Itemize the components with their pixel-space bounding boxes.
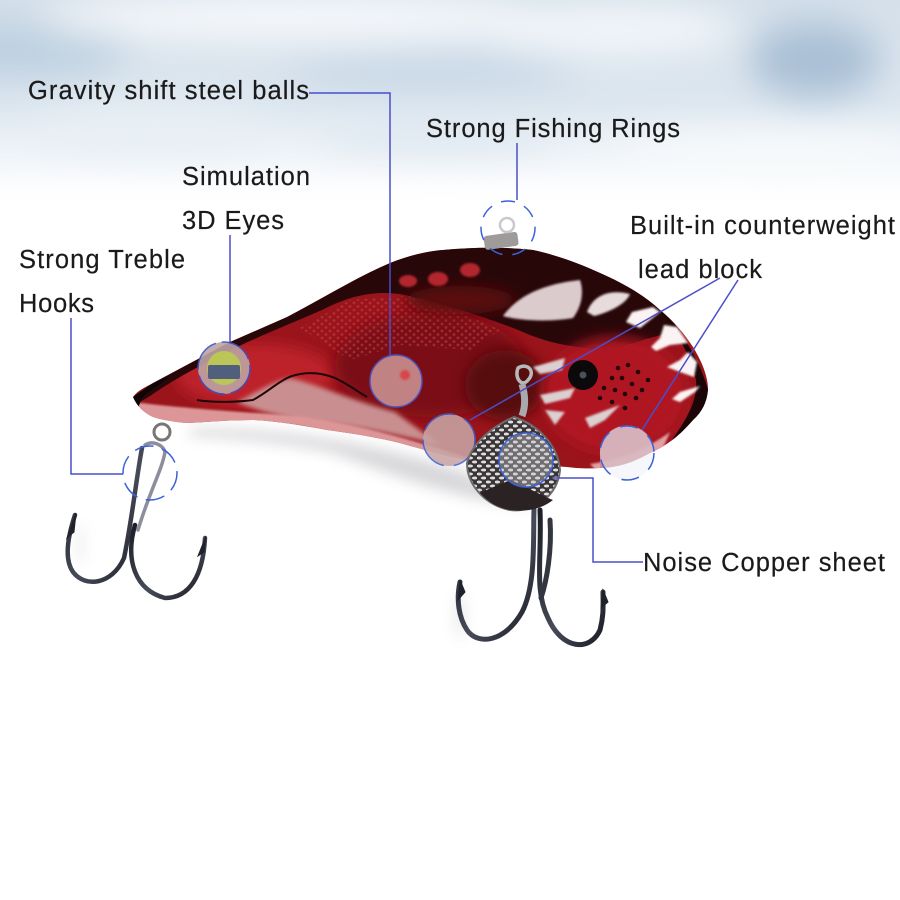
black eye — [568, 360, 598, 390]
line: steel balls — [309, 93, 390, 355]
circle: counterweight belly left — [423, 414, 475, 466]
line: copper sheet — [552, 478, 643, 562]
shadow under lure — [77, 428, 540, 639]
label: noise copper sheet: Noise Copper sheet — [643, 549, 885, 577]
rear treble hook — [67, 424, 206, 598]
label: strong fishing rings: Strong Fishing Rings — [426, 115, 680, 143]
label: strong treble hooks: Hooks — [19, 290, 94, 318]
label: strong treble hooks — [19, 246, 185, 318]
back segments — [399, 263, 480, 287]
label: built-in counterweight lead block — [630, 212, 895, 284]
belly rim at head — [589, 432, 671, 468]
label: built-in counterweight lead block: Built-in counterweight — [630, 212, 895, 240]
front treble hook — [458, 510, 608, 645]
line: counterweight upper — [470, 278, 720, 420]
body line — [197, 373, 367, 402]
dark rim on head — [660, 310, 708, 446]
circle: counterweight belly right — [600, 425, 654, 480]
circle: steel ball — [370, 355, 422, 407]
left flank bright red — [175, 343, 335, 407]
dark red shoulder — [405, 286, 515, 314]
background: snowy mountain sky — [0, 0, 900, 260]
line: treble hooks — [71, 318, 123, 474]
label: built-in counterweight lead block: lead block — [638, 256, 762, 284]
dark back — [133, 246, 680, 402]
second white plate — [587, 292, 630, 316]
head red — [543, 337, 687, 453]
circle: 3D eye — [198, 342, 250, 394]
label: simulation 3D eyes: Simulation — [182, 163, 310, 191]
silver flecks — [533, 358, 620, 428]
scaled mid flank — [335, 313, 525, 417]
lure body — [133, 246, 708, 475]
label: strong treble hooks: Strong Treble — [19, 246, 185, 274]
leader lines — [71, 93, 738, 562]
spinner blade — [467, 366, 560, 511]
line: 3D eyes — [229, 235, 231, 342]
belly translucent pink — [237, 378, 440, 445]
label: simulation 3D eyes — [182, 163, 310, 235]
line: fishing rings — [516, 143, 518, 200]
icon: fishing ring — [481, 201, 535, 255]
white plate on back — [503, 280, 582, 320]
label: gravity shift steel balls: Gravity shift steel balls — [28, 77, 309, 105]
nose dark tip — [133, 376, 170, 408]
line: counterweight lower — [642, 280, 738, 430]
white teeth — [626, 307, 700, 402]
eye socket dots — [598, 363, 650, 410]
label: simulation 3D eyes: 3D Eyes — [182, 207, 284, 235]
body base shape — [133, 248, 708, 468]
